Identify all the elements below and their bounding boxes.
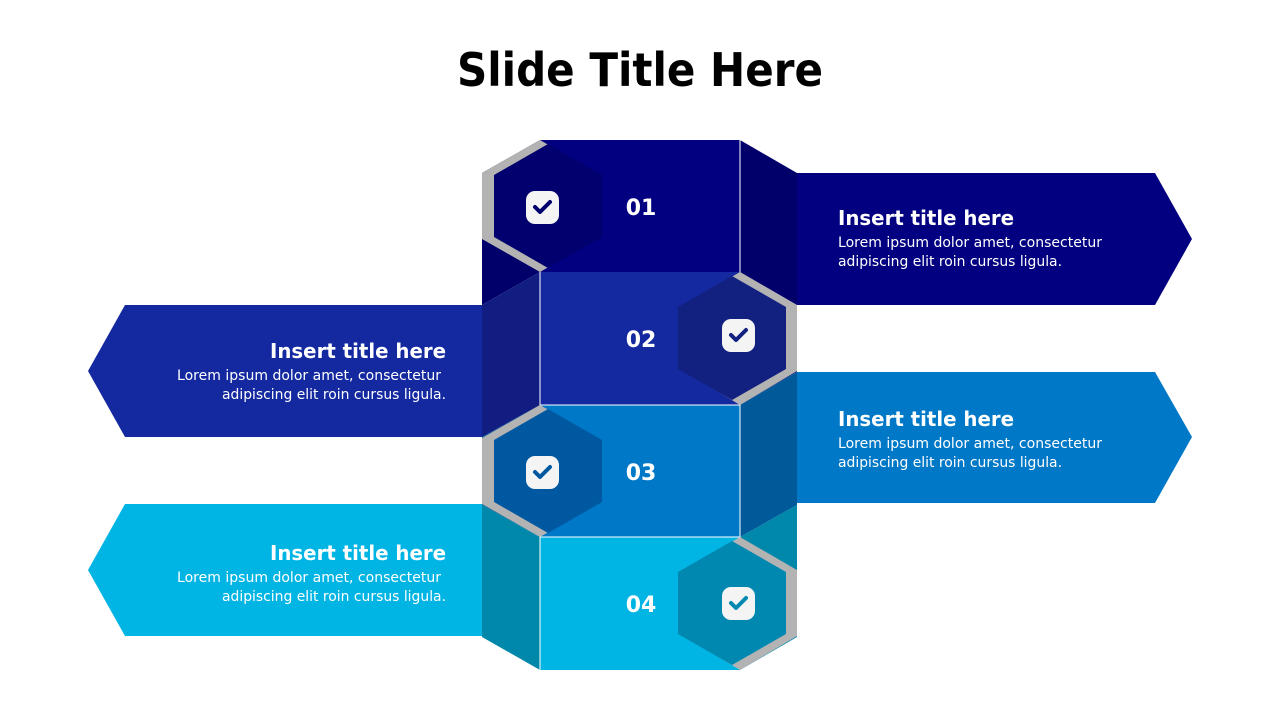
arrow 4 left: Insert title here (270, 541, 446, 565)
central column (482, 140, 797, 670)
arrow 4 left: adipiscing elit roin cursus ligula. (222, 589, 446, 605)
arrow 1 right: adipiscing elit roin cursus ligula. (838, 254, 1062, 270)
arrow 2 left: Insert title here (270, 339, 446, 363)
arrow 3 right (797, 372, 1192, 503)
arrow 4 left (88, 504, 482, 636)
arrow 2 left: adipiscing elit roin cursus ligula. (222, 387, 446, 403)
hexagon 3 (482, 405, 602, 537)
arrow 1 right: Lorem ipsum dolor amet, consectetur (838, 235, 1102, 251)
arrow 2 left (88, 305, 482, 437)
arrow 4 left: Lorem ipsum dolor amet, consectetur (177, 570, 441, 586)
number 03: 03 (626, 461, 656, 486)
arrow 3 right: adipiscing elit roin cursus ligula. (838, 455, 1062, 471)
hexagon 4 (678, 537, 797, 670)
arrow 2 left: Lorem ipsum dolor amet, consectetur (177, 368, 441, 384)
arrow 1 right (797, 173, 1192, 305)
number 04: 04 (626, 593, 656, 618)
arrow 3 right: Insert title here (838, 407, 1014, 431)
number 02: 02 (626, 328, 656, 353)
hexagon 2 (678, 272, 797, 405)
arrow 3 right: Lorem ipsum dolor amet, consectetur (838, 436, 1102, 452)
title: Slide Title Here (457, 43, 823, 97)
arrow 1 right: Insert title here (838, 206, 1014, 230)
number 01: 01 (626, 196, 656, 221)
hexagon 1 (482, 140, 602, 272)
